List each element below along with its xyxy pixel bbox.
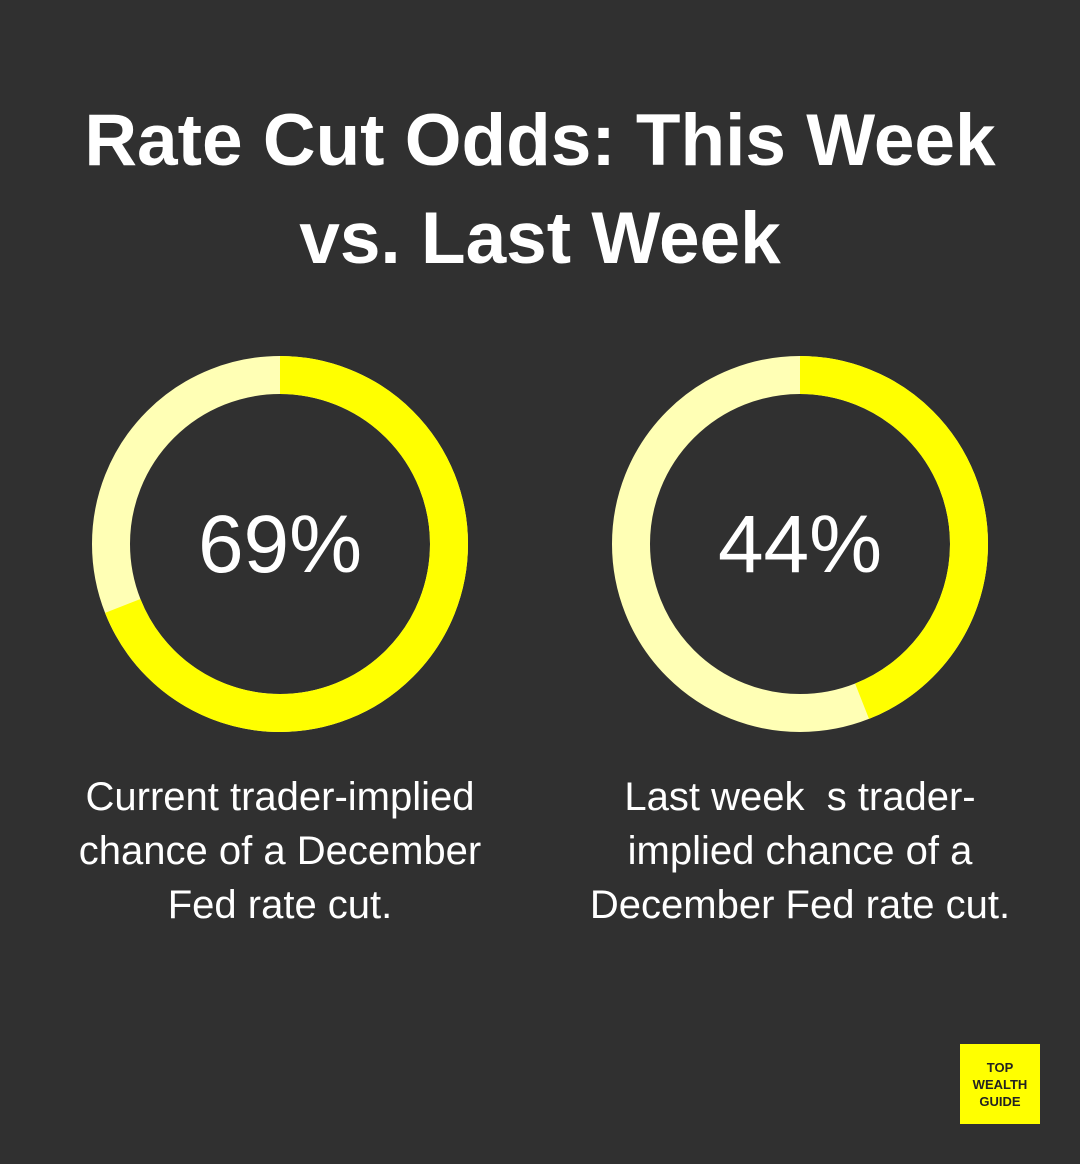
donut chart: last week 44%: 44% xyxy=(718,499,882,590)
caption: this week: Current trader-implied chance of a December Fed rate cut. xyxy=(79,775,481,927)
donut chart: this week 69% xyxy=(92,356,468,732)
title xyxy=(84,100,996,279)
logo: GUIDE xyxy=(979,1094,1021,1109)
logo xyxy=(960,1044,1040,1124)
title: Rate Cut Odds: This Week xyxy=(84,100,996,181)
title: vs. Last Week xyxy=(299,198,781,279)
logo: TOP xyxy=(987,1060,1013,1075)
caption: last week: Last week s trader-implied chance of a December Fed rate cut. xyxy=(590,775,1010,927)
donut chart: this week 69%: 69% xyxy=(198,499,362,590)
logo: WEALTH xyxy=(973,1077,1027,1092)
donut chart: last week 44% xyxy=(612,356,988,732)
